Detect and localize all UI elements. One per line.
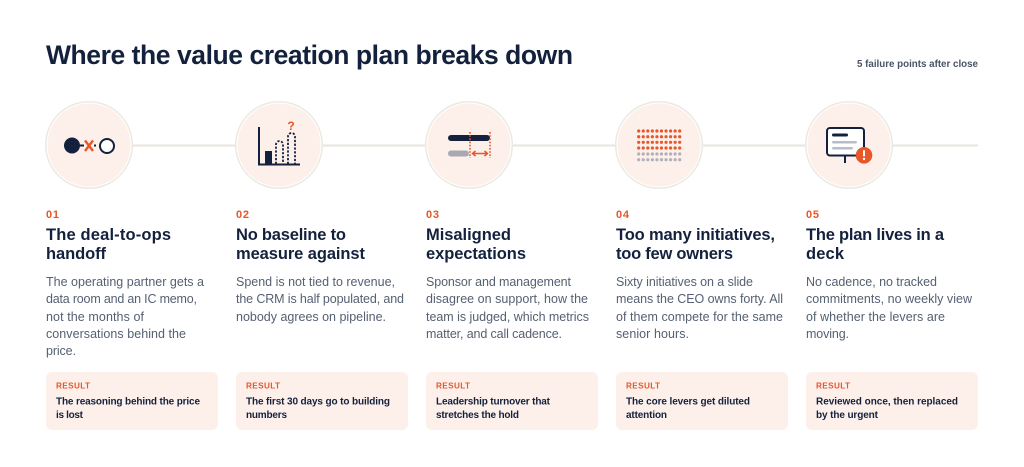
description: price. — [46, 344, 76, 358]
result callout: Leadership turnover that — [436, 396, 551, 408]
heading: The deal-to-ops — [46, 226, 171, 244]
result callout: Reviewed once, then replaced — [816, 396, 958, 408]
panel: step 2 — [236, 102, 408, 430]
description: data room and an IC memo, — [46, 292, 197, 306]
result callout — [46, 372, 218, 430]
title: Where the value creation plan breaks down — [46, 40, 573, 70]
heading: expectations — [426, 245, 526, 263]
result callout: numbers — [246, 410, 287, 421]
result callout: The reasoning behind the price — [56, 396, 200, 408]
description: commitments, no weekly view — [806, 292, 973, 306]
result callout: RESULT — [816, 382, 850, 390]
result callout: by the urgent — [816, 410, 879, 421]
step number 05: 05 — [806, 209, 819, 221]
result callout: The first 30 days go to building — [246, 396, 390, 408]
description: team is judged, which metrics — [426, 310, 589, 324]
panel: step 4 — [616, 102, 788, 430]
result callout — [236, 372, 408, 430]
heading — [236, 226, 366, 263]
heading — [46, 226, 171, 263]
heading — [806, 226, 945, 263]
description — [46, 275, 204, 358]
description — [426, 275, 589, 341]
step number 03: 03 — [426, 209, 439, 221]
icon: broken handoff — [46, 102, 132, 188]
subtitle: failure point count: 5 failure points after close — [857, 59, 979, 70]
result callout: RESULT — [246, 382, 280, 390]
result callout: attention — [626, 410, 667, 421]
result callout: stretches the hold — [436, 410, 519, 421]
panel: step 3 — [426, 102, 598, 430]
icon: dot grid of initiatives — [616, 102, 702, 188]
description — [236, 275, 404, 324]
step number 01: 01 — [46, 209, 59, 221]
result callout: RESULT — [56, 382, 90, 390]
description: The operating partner gets a — [46, 275, 204, 289]
description: Spend is not tied to revenue, — [236, 275, 395, 289]
description: of whether the levers are — [806, 310, 945, 324]
result callout — [426, 372, 598, 430]
icon: misaligned bars — [426, 102, 512, 188]
description: disagree on support, how the — [426, 292, 588, 306]
description: of them compete for the same — [616, 310, 783, 324]
heading: Too many initiatives, — [616, 226, 775, 244]
heading: deck — [806, 245, 845, 263]
heading: handoff — [46, 245, 106, 263]
step number 02: 02 — [236, 209, 249, 221]
description: moving. — [806, 327, 849, 341]
step number 04: 04 — [616, 209, 630, 221]
heading: The plan lives in a — [806, 226, 945, 244]
heading: measure against — [236, 245, 366, 263]
panel: step 1 — [46, 102, 218, 430]
result callout — [616, 372, 788, 430]
description — [806, 275, 973, 341]
result callout: RESULT — [436, 382, 470, 390]
description: conversations behind the — [46, 327, 186, 341]
icon: slide deck with alert — [806, 102, 892, 188]
heading: Misaligned — [426, 226, 511, 244]
timeline connector — [46, 144, 978, 146]
description: Sponsor and management — [426, 275, 572, 289]
description: nobody agrees on pipeline. — [236, 310, 386, 324]
panel: step 5 — [806, 102, 978, 430]
description: Sixty initiatives on a slide — [616, 275, 753, 289]
description: the CRM is half populated, and — [236, 292, 404, 306]
result callout: is lost — [56, 410, 84, 421]
heading — [616, 226, 775, 263]
description: matter, and call cadence. — [426, 327, 562, 341]
description: No cadence, no tracked — [806, 275, 937, 289]
description — [616, 275, 783, 341]
description: senior hours. — [616, 327, 689, 341]
heading: No baseline to — [236, 226, 346, 244]
heading — [426, 226, 526, 263]
heading: too few owners — [616, 245, 733, 263]
icon: missing baseline chart: ? — [287, 119, 295, 133]
result callout: The core levers get diluted — [626, 396, 750, 408]
description: means the CEO owns forty. All — [616, 292, 783, 306]
description: not the months of — [46, 310, 145, 324]
icon: missing baseline chart — [236, 102, 322, 188]
result callout: RESULT — [626, 382, 660, 390]
result callout — [806, 372, 978, 430]
